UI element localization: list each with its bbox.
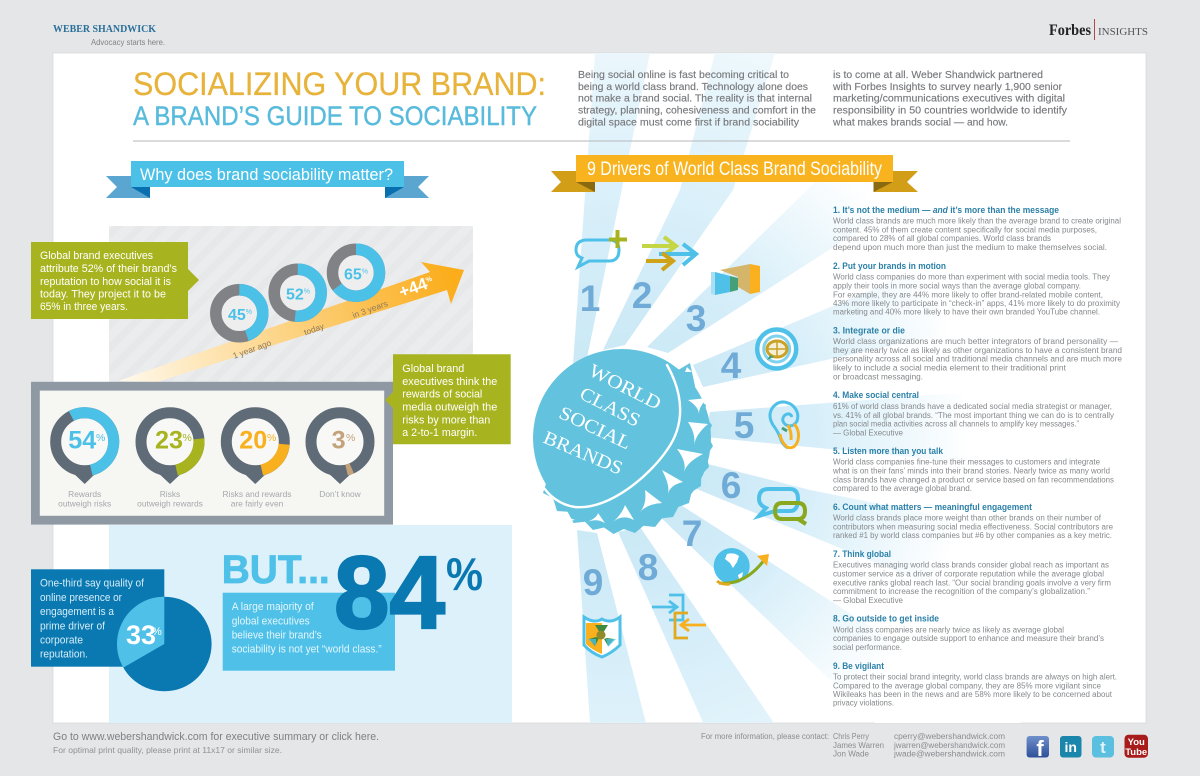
ring: 3% don't know: Don’t know [319,489,362,499]
driver 2 [833,261,1120,317]
intro text [578,70,1068,128]
footer contacts: jwade@webershandwick.com [893,750,1005,758]
pie chart: 33% [117,597,212,691]
callout: one-third with pie chart: reputation. [40,649,88,661]
icon: arrows and brackets [652,595,706,638]
bottle cap: world class social brands: CLASS [576,383,643,432]
driver 9: Compared to the average global company, they are 85% more vigilant since [833,681,1102,690]
icon: twitter [1092,736,1114,758]
footer contacts: For more information, please contact: [701,732,829,741]
driver 2: 2. Put your brands in motion [833,261,946,271]
arrow: reputation growth: today [302,321,326,337]
arrow: reputation growth: in 3 years [351,298,389,320]
driver 5: World class companies fine-tune their messages to customers and integrate [833,458,1101,467]
callout: 2-to-1 margin [385,354,511,444]
icon: target with bubble [757,330,796,368]
ring: 20% fairly even: % [267,432,276,444]
driver 3: they are nearly twice as likely as other organizations to have a consistent brand [833,346,1122,355]
callout: one-third with pie chart [31,569,212,691]
intro text: strategy, planning, cohesiveness and comfort in the [578,106,816,117]
driver 4: 61% of world class brands have a dedicated social media strategist or manager, [833,402,1112,411]
driver 6 [833,502,1114,540]
logo: Forbes Insights [1049,19,1148,40]
driver 8: social performance. [833,643,902,652]
ring: 20% fairly even: 20 [239,426,267,454]
pie chart: 33%: % [152,626,162,638]
callout: reputation attribution: Global brand executives [40,250,154,262]
driver 4: — Global Executive [833,428,904,437]
driver 9 [833,661,1117,708]
ring: 23% risks outweigh rewards: 23 [155,426,183,454]
driver 1: World class brands are much more likely than the average brand to create original [833,216,1121,226]
driver 7: — Global Executive [833,596,904,605]
callout: reputation attribution [31,242,199,319]
driver 8: World class companies are nearly twice as likely as average global [833,625,1064,634]
pie chart: 33%: 33 [126,620,156,650]
icon: youtube [1124,735,1148,758]
callout: reputation attribution: today. They project it to be [40,288,166,300]
icon: ear [770,402,798,448]
driver 3 [833,326,1123,381]
ring: 20% fairly even [223,410,291,508]
ring: 20% fairly even: are fairly even [231,498,284,508]
bottle cap: world class social brands: SOCIAL [555,403,634,454]
donut: 52% [274,269,321,316]
driver 7 [833,549,1111,605]
driver 6: 6. Count what matters — meaningful engagement [833,502,1032,512]
driver numbers: 3 [686,298,706,339]
logo: Forbes Insights: Forbes [1049,22,1091,39]
driver 1: content. 45% of them create content specifically for social media purposes, [833,226,1097,234]
driver 9: privacy violations. [833,699,894,708]
footer contacts: cperry@webershandwick.com [894,732,1005,741]
intro text: with Forbes Insights to survey nearly 1,900 senior [832,82,1063,93]
footer left text: Go to www.webershandwick.com for executive summary or click here. [53,731,379,743]
callout: reputation attribution: 65% in three years. [40,301,128,313]
driver 3: 3. Integrate or die [833,326,905,336]
sunburst rays behind the bottle cap [573,53,1021,723]
driver 6: contributors when measuring social media effectiveness. Social contributors are [833,522,1114,531]
ribbon: why does brand sociability matter: Why does brand sociability matter? [140,165,393,184]
footer contacts [701,732,1005,758]
driver 2: 43% more likely to participate in “check-in” apps, 41% more likely to do proximity [833,299,1120,308]
driver 7: executive ranks global reach last. “Our social branding goals involve a very firm [833,578,1111,587]
title: A BRAND’S GUIDE TO SOCIABILITY [133,101,537,131]
callout: 2-to-1 margin: executives think the [402,376,497,388]
footer left text [53,731,379,755]
driver 5: 5. Listen more than you talk [833,446,944,456]
footer contacts: Chris Perry [833,732,869,741]
logo: Weber Shandwick: Advocacy starts here. [91,38,165,47]
intro text: what makes brands social — and how. [832,117,1008,128]
driver 7: 7. Think global [833,549,891,559]
ring: 54% rewards outweigh risks [46,403,124,508]
driver numbers: 5 [734,405,754,446]
icon: arrows in motion [642,237,696,270]
callout: one-third with pie chart: One-third say quality of [40,578,145,590]
bottle cap: world class social brands [533,349,713,534]
driver 5: compared to the average global brand. [833,484,972,493]
driver 9: 9. Be vigilant [833,661,884,671]
intro text: not make a brand social. The reality is that internal [578,94,812,105]
icon: facebook: f [1036,736,1044,761]
ring: 3% don't know [302,403,378,499]
driver 1: depend upon much more than just the medium to make themselves social. [833,243,1107,252]
driver 7: Executives managing world class brands consider global reach as important as [833,561,1109,570]
ring: 54% rewards outweigh risks: % [96,432,105,444]
ring: 54% rewards outweigh risks: outweigh risks [58,498,111,508]
driver 1: 1. It’s not the medium — and it’s more than the message [833,205,1059,215]
callout: one-third with pie chart: corporate [40,635,83,647]
driver 7: customer service as a driver of corporate reputation while the average global [833,569,1104,578]
driver 2: World class companies do more than experiment with social media tools. They [833,273,1110,282]
driver 4: plan social media activities across all channels to amplify key messages.” [833,420,1079,429]
driver 4 [833,390,1114,437]
icon: youtube: Tube [1125,747,1147,758]
driver numbers: 9 [583,562,603,603]
stat: but 84%: BUT... [222,548,330,592]
logo: Forbes Insights: INSIGHTS [1098,26,1148,38]
driver 5: class brands have changed a product or service based on fan recommendations [833,475,1114,484]
driver 5: what is on their fans’ minds into their brand stories. Nearly twice as many world [832,466,1110,475]
driver 2: For example, they are 44% more likely to offer brand-related mobile content, [833,290,1103,299]
stat: but 84%: sociability is not yet “world class.” [232,643,382,655]
driver 3: likely to include a social media element to their traditional print [833,364,1067,373]
ring: 3% don't know: % [346,432,355,444]
title: SOCIALIZING YOUR BRAND: [133,66,546,102]
driver numbers [580,275,754,603]
driver 3: or broadcast messaging. [833,372,923,381]
arrow: reputation growth [118,262,464,382]
light blue panel [109,525,512,723]
panel: hatched reputation chart background [109,226,473,382]
footer contacts: James Warren [833,741,884,750]
arrow: reputation growth: +44 [396,274,430,302]
driver 1: compared to 28% of all global companies. World class brands [833,234,1051,243]
callout: one-third with pie chart: prime driver of [40,620,106,632]
ring: 23% risks outweigh rewards: % [182,432,192,444]
footer left text: For optimal print quality, please print at 11x17 or similar size. [53,745,282,755]
driver 6: ranked #1 by world class companies but #6 by other companies as a key metric. [833,531,1112,540]
driver 3: World class organizations are much better integrators of brand personality — [833,337,1118,346]
footer contacts: jwarren@webershandwick.com [893,741,1005,750]
callout: reputation attribution: reputation to how social it is [40,276,172,288]
stat: but 84%: global executives [232,615,310,627]
driver 2: apply their tools in more social ways than the average global company. [833,281,1081,290]
callout: 2-to-1 margin: rewards of social [402,389,482,401]
driver numbers: 7 [682,513,702,554]
driver 4: 4. Make social central [833,390,919,400]
logo: Weber Shandwick [53,24,165,47]
driver 9: Wikileaks has been in the news and are 58% more likely to be concerned about [833,690,1113,699]
intro text: responsibility in 50 countries worldwide to identify [833,106,1068,117]
driver 9: To protect their social brand integrity, world class brands are always on high alert. [833,672,1117,681]
ring: 54% rewards outweigh risks: 54 [68,426,96,454]
icon: shield with radiation symbol [584,617,620,657]
driver 8: 8. Go outside to get inside [833,614,939,624]
bottle cap: world class social brands: BRANDS [540,427,626,480]
donut: 45%: 45 [228,307,246,324]
icon: globe with arrow [714,548,769,584]
ribbon: 9 drivers [551,155,918,192]
callout: one-third with pie chart: engagement is a [40,606,114,618]
driver numbers: 8 [638,547,658,588]
driver 7: commitment to increase the recognition of the company’s globalization.” [833,587,1090,596]
callout: reputation attribution: attribute 52% of their brand’s [40,263,178,275]
intro text: marketing/communications executives with digital [833,94,1065,105]
donut: 52%: 52 [286,286,304,303]
ring: 23% risks outweigh rewards [137,410,203,508]
ring: 3% don't know: 3 [332,426,346,454]
stat: but 84%: % [446,548,483,600]
driver 8 [833,614,1104,652]
ring: 23% risks outweigh rewards: outweigh rewards [137,498,203,508]
white content panel [53,53,1146,723]
driver 4: vs. 41% of all global brands. “The most important thing we can do is to centrally [833,411,1114,420]
donut: 45% [216,290,263,337]
driver 8: companies to engage outside support to enhance and measure their brand’s [833,634,1104,643]
ring: 54% rewards outweigh risks: Rewards [68,489,101,499]
icon: overlapping speech bubbles [759,489,806,524]
driver numbers: 6 [721,465,741,506]
title [133,66,546,131]
driver 6: World class brands place more weight than other brands on their number of [833,513,1102,522]
icon: linkedin: in [1064,739,1077,755]
ring: 23% risks outweigh rewards: Risks [160,489,180,499]
arrow: reputation growth: % [425,275,434,284]
ribbon: why does brand sociability matter [106,161,429,198]
icon: facebook [1027,736,1049,761]
intro text: being a world class brand. Technology alone does [578,82,808,93]
intro text: Being social online is fast becoming critical to [578,70,789,81]
driver text blocks [832,205,1123,708]
intro text: is to come at all. Weber Shandwick partnered [833,70,1043,81]
icon: 3D blocks [711,264,760,295]
donut: 65% [332,249,380,296]
arrow: reputation growth: 1 year ago [231,338,273,361]
driver numbers: 1 [580,278,600,319]
stat: but 84%: believe their brand’s [232,629,322,641]
driver 3: personality across all social and traditional media channels and are much more [833,355,1123,364]
callout: one-third with pie chart: online presence or [40,592,122,604]
ribbon: 9 drivers: 9 Drivers of World Class Brand Sociability [587,159,882,180]
icon: twitter: t [1100,738,1106,757]
icon: linkedin [1060,736,1082,758]
footer contacts: Jon Wade [833,750,870,758]
callout: 2-to-1 margin: a 2-to-1 margin. [402,427,477,439]
driver 2: marketing and 40% more likely to have their own branded YouTube channel. [833,308,1100,317]
panel: rewards vs risks [35,386,389,520]
driver numbers: 2 [632,275,652,316]
driver numbers: 4 [721,345,742,386]
callout: 2-to-1 margin: risks by more than [402,414,490,426]
donut: 45%: % [246,309,252,316]
donut: 65%: 65 [344,266,362,283]
stat: but 84%: A large majority of [232,601,315,613]
donut: 52%: % [304,288,310,295]
icon: youtube: You [1128,737,1145,748]
driver 5 [832,446,1114,493]
ring: 20% fairly even: Risks and rewards [223,489,291,499]
driver 1 [833,205,1121,252]
icon: speech bubble plus [576,230,627,267]
bottle cap: world class social brands: WORLD [585,360,664,415]
donut: 65%: % [362,268,368,275]
intro text: digital space must come first if brand sociability [578,117,800,128]
logo: Weber Shandwick: WEBER SHANDWICK [53,24,157,35]
callout: 2-to-1 margin: Global brand [402,363,464,375]
callout: 2-to-1 margin: media outweigh the [402,401,497,413]
stat: but 84%: 84 [334,535,445,650]
stat: but 84% [222,535,483,671]
